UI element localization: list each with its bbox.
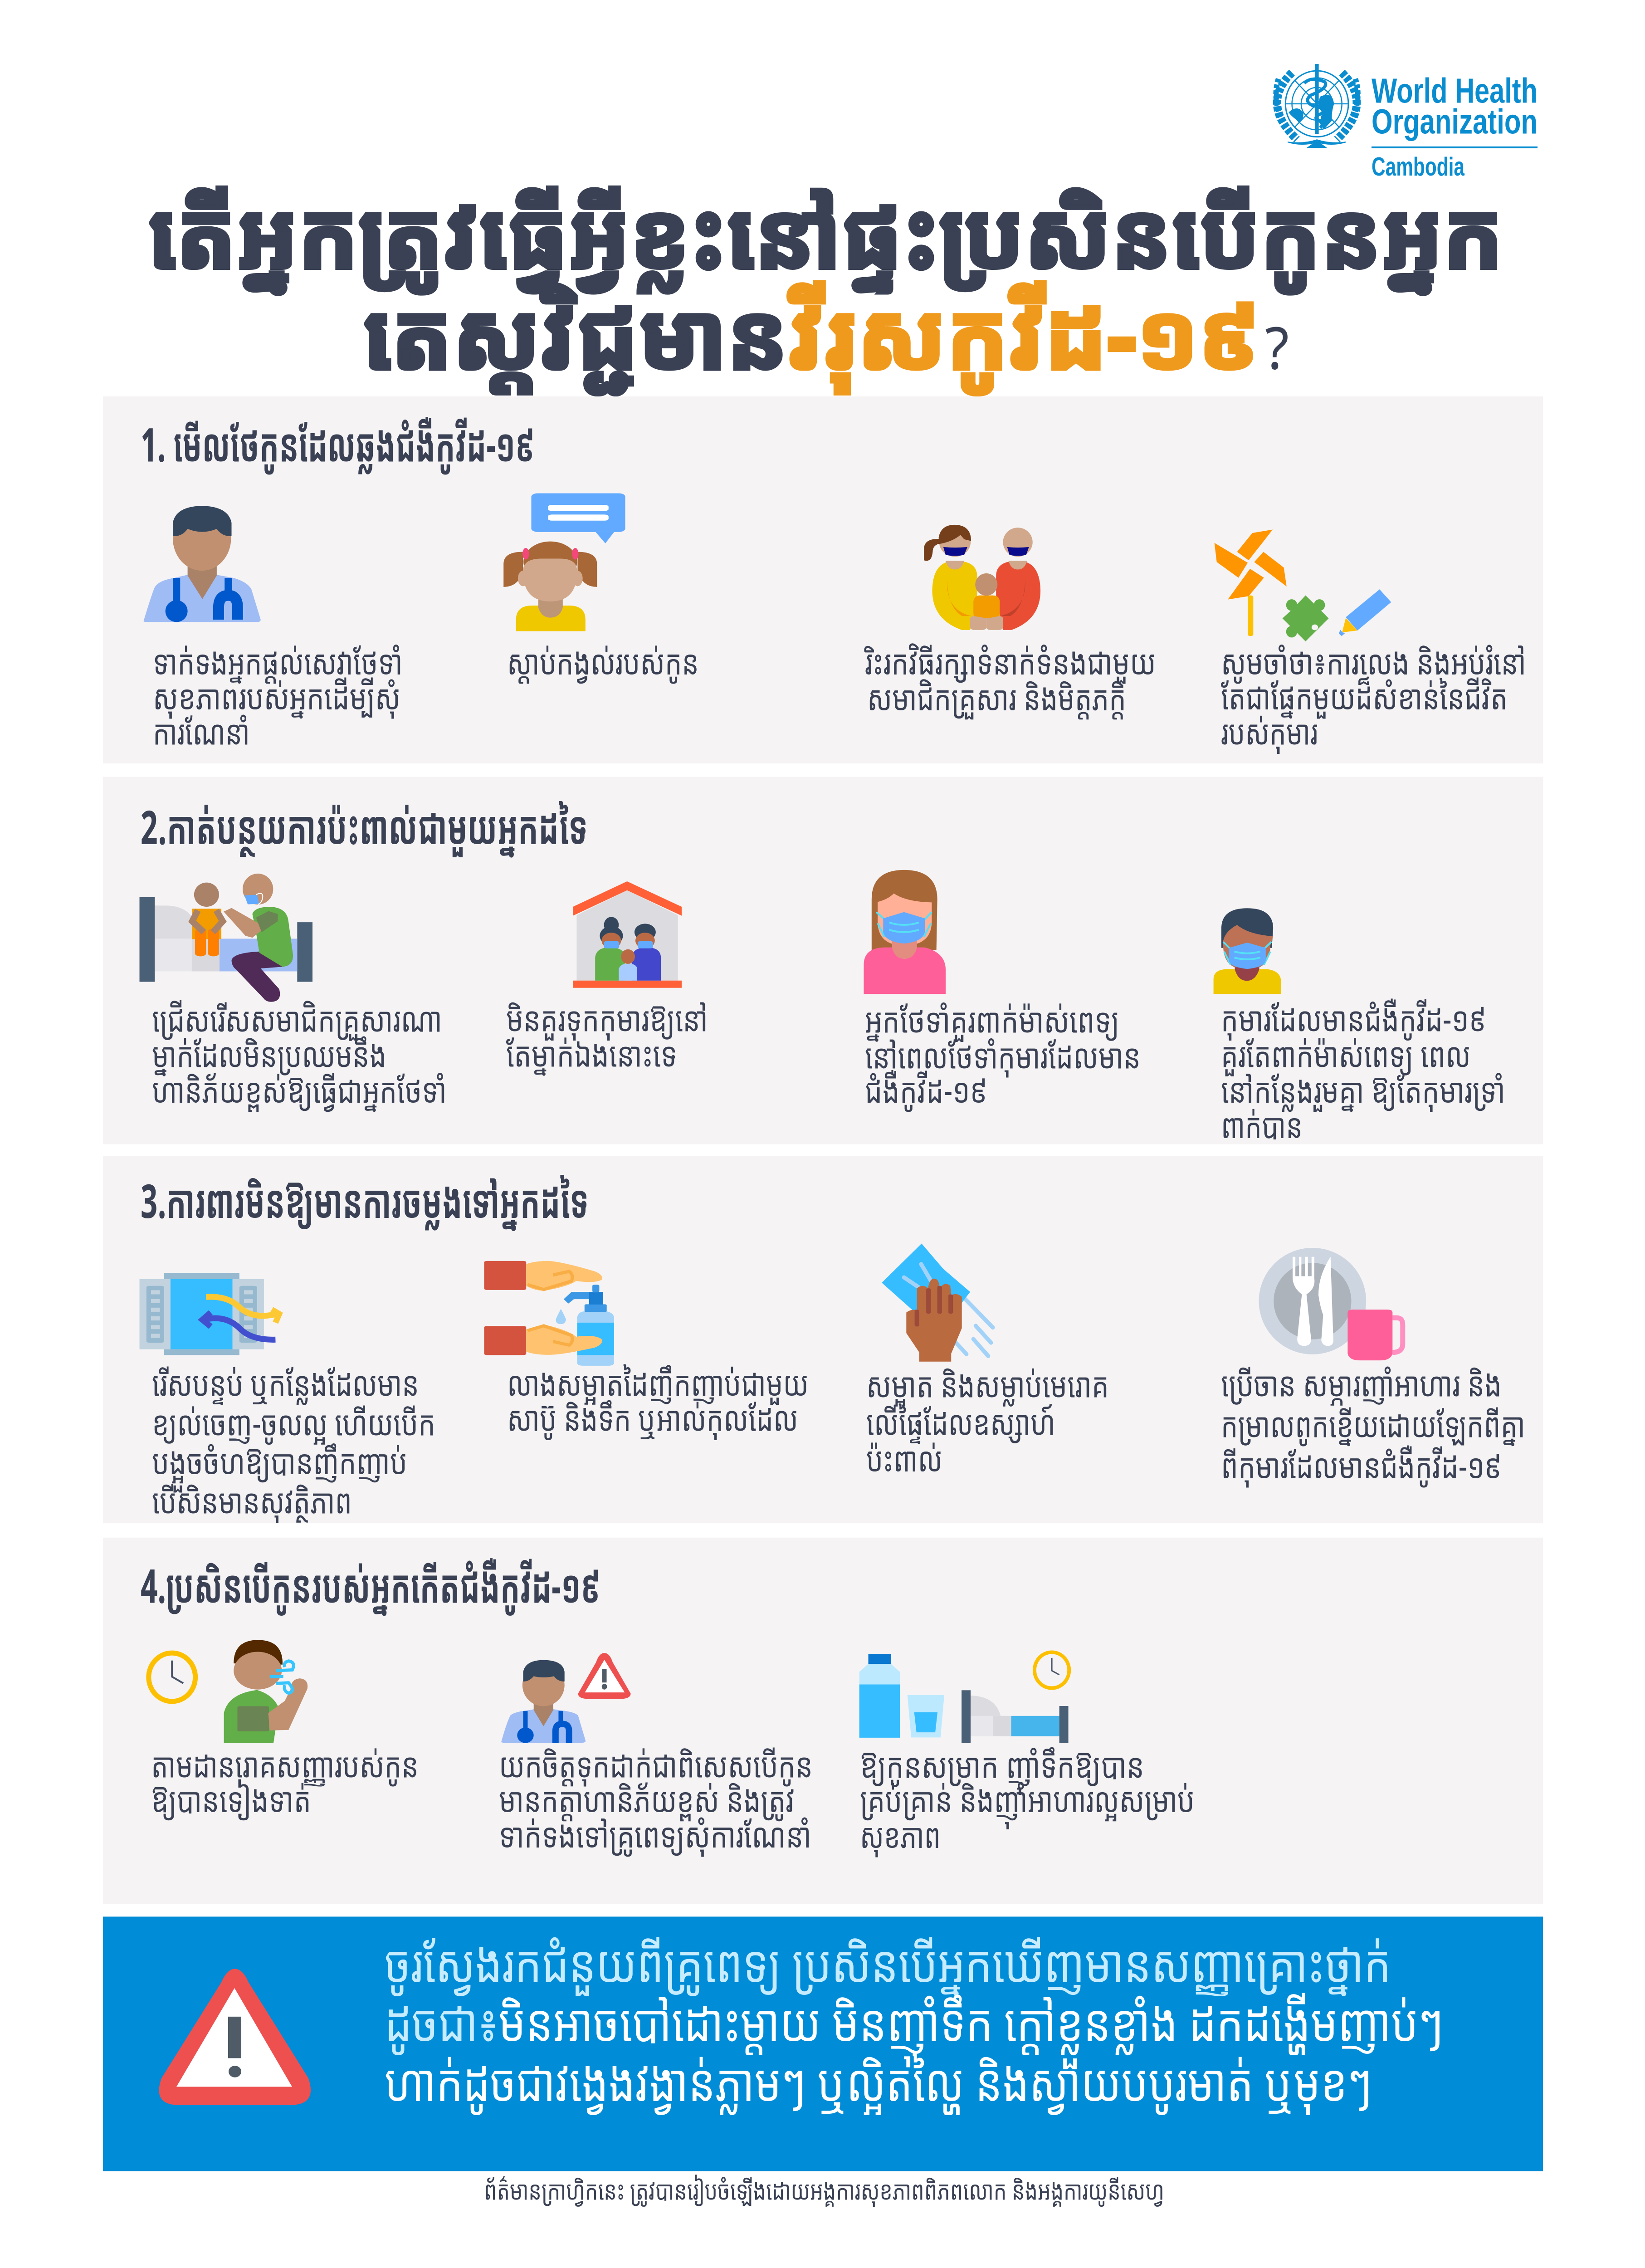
text: keep in touch: រិះរកវិធីរក្សាទំនាក់ទំនងជាមួយ: [864, 639, 1156, 685]
text: use separate dishes: [1221, 1360, 1525, 1489]
text: do not leave children alone: តែម្នាក់ឯងនោះទេ: [506, 1031, 677, 1077]
text: seek care if danger signs: ហាក់ដូចជាវង្វេងវង្វាន់ភ្លាមៗ ឬល្អិតល្ហៃ និងស្វាយបបូរមាត់ ឬមុខៗ: [385, 2046, 1372, 2116]
panel: 3 prevent transmission: [103, 1156, 1543, 1524]
text: use separate dishes: ពីកុមារដែលមានជំងឺកូវីដ-១៩: [1221, 1442, 1502, 1489]
text: play and learning: របស់កុមារ: [1221, 709, 1318, 755]
icon: coughing child and clock: [149, 1640, 308, 1743]
text: caregiver should wear a mask: ជំងឺកូវីដ-១៩: [865, 1067, 987, 1113]
text: clean and disinfect surfaces: ប៉ះពាល់: [866, 1436, 942, 1482]
text: watch for high risk factors: មានកត្តាហានិភ័យខ្ពស់ និងត្រូវ: [499, 1776, 795, 1823]
text: child should wear a mask: នៅកន្លែងរួមគ្នា ឱ្យតែកុមារទ្រាំ: [1221, 1067, 1505, 1113]
text: wash hands frequently: សាប៊ូ និងទឹក ឬអាល់កុលដែល: [507, 1395, 798, 1441]
text: seek care if danger signs: ដូចជា៖មិនអាចបៅដោះម្តាយ មិនញ៉ាំទឹក ក្តៅខ្លួនខ្លាំង ដកដង្ហើមញាប់ៗ: [385, 1986, 1444, 2069]
text: monitor symptoms: [151, 1741, 419, 1823]
footer credit: ព័ត៌មានក្រាហ្វិកនេះ ត្រូវបានរៀបចំឡើងដោយអង្គការសុខភាពពិភពលោក និងអង្គការយូនីសេហ្វ: [484, 2172, 1164, 2207]
icon: ventilated window: [140, 1273, 279, 1355]
text: caregiver should wear a mask: នៅពេលថែទាំកុមារដែលមាន: [865, 1032, 1141, 1079]
icon: water bottle, glass, bed and clock: [859, 1652, 1069, 1743]
text: choose a caregiver: ហានិភ័យខ្ពស់ឱ្យធ្វើជាអ្នកថែទាំ: [152, 1067, 447, 1113]
panel: danger signs callout: [103, 1916, 1543, 2171]
text: contact your health provider: ទាក់ទងអ្នកផ្តល់សេវាថែទាំ: [153, 639, 403, 685]
icon: doctor: [143, 506, 261, 622]
text: wash hands frequently: [507, 1359, 809, 1441]
icon: warning triangle: [159, 1969, 311, 2105]
logo: World Health Organization Cambodia: [1276, 64, 1538, 181]
title: [148, 170, 1503, 396]
text: contact your health provider: [153, 639, 403, 755]
text: contact your health provider: សុខភាពរបស់អ្នកដើម្បីសុំ: [153, 674, 400, 720]
text: play and learning: តែជាផ្នែកមួយដ៏សំខាន់នៃជីវិត: [1221, 674, 1508, 720]
text: rest, fluids and food: គ្រប់គ្រាន់ និងញ៉ាំអាហារល្អសម្រាប់: [860, 1776, 1195, 1829]
title: តើអ្នកត្រូវធ្វើអ្វីខ្លះនៅផ្ទះប្រសិនបើកូនអ្នក: [148, 170, 1503, 295]
text: choose a ventilated room: បើសិនមានសុវត្ថិភាព: [152, 1477, 352, 1524]
logo: World Health Organization Cambodia: World Health: [1372, 72, 1538, 110]
text: choose a ventilated room: រើសបន្ទប់ ឬកន្លែងដែលមាន: [152, 1360, 419, 1407]
icon: plate, cutlery and mug: [1259, 1248, 1403, 1360]
text: do not leave children alone: មិនគួរទុកកុមារឱ្យនៅ: [506, 995, 708, 1041]
icon: hand washing with soap: [484, 1261, 614, 1366]
text: choose a caregiver: ម្នាក់ដែលមិនប្រឈមនឹង: [152, 1031, 386, 1077]
icon: hand wiping surface with cloth: [882, 1243, 993, 1362]
text: contact your health provider: ការណែនាំ: [153, 709, 250, 755]
icon: family with masks: [924, 525, 1040, 630]
icon: family in house: [573, 881, 682, 988]
logo: World Health Organization Cambodia: Organization: [1372, 103, 1538, 141]
icon: woman wearing mask: [864, 870, 946, 994]
text: play and learning: [1221, 639, 1526, 755]
text: wash hands frequently: លាងសម្អាតដៃញឹកញាប់ជាមួយ: [507, 1359, 809, 1406]
text: use separate dishes: កម្រាលពូកខ្នើយដោយឡែកពីគ្នា: [1221, 1401, 1525, 1447]
panel: 4 if your child has COVID-19: [103, 1538, 1543, 1904]
text: choose a caregiver: [152, 996, 447, 1113]
icon: WHO emblem: [1276, 64, 1358, 148]
text: seek care if danger signs: [385, 1927, 1444, 2116]
text: watch for high risk factors: ទាក់ទងទៅគ្រូពេទ្យសុំការណែនាំ: [499, 1811, 811, 1858]
text: watch for high risk factors: យកចិត្តទុកដាក់ជាពិសេសបើកូន: [499, 1741, 813, 1788]
logo: World Health Organization Cambodia: Cambodia: [1372, 152, 1465, 181]
heading: section 4: 4.ប្រសិនបើកូនរបស់អ្នកកើតជំងឺកូវីដ-១៩: [141, 1554, 600, 1617]
icon: child wearing mask: [1214, 908, 1281, 994]
icon: pinwheel, puzzle piece and pencil: [1215, 529, 1391, 641]
text: clean and disinfect surfaces: សម្អាត និងសម្លាប់មេរោគ: [866, 1361, 1109, 1408]
text: listen to concerns: ស្តាប់កង្វល់របស់កូន: [507, 639, 699, 685]
heading: section 3: 3.ការពារមិនឱ្យមានការចម្លងទៅអ្នកដទៃ: [141, 1169, 589, 1232]
text: child should wear a mask: កុមារដែលមានជំងឺកូវីដ-១៩: [1221, 995, 1486, 1041]
text: monitor symptoms: តាមដានរោគសញ្ញារបស់កូន: [151, 1741, 419, 1788]
title: ?: [1265, 307, 1289, 386]
title: តេស្តវិជ្ជមាន: [363, 271, 788, 396]
panel: 2 reduce contact: [103, 777, 1543, 1149]
text: choose a ventilated room: [152, 1360, 435, 1524]
text: monitor symptoms: ឱ្យបានទៀងទាត់: [151, 1776, 311, 1823]
icon: girl with speech bubble: [503, 493, 625, 631]
text: use separate dishes: ប្រើចាន សម្ភារញាំអាហារ និង: [1221, 1360, 1502, 1407]
text: child should wear a mask: គួរតែពាក់ម៉ាស់ពេទ្យ ពេល: [1221, 1031, 1471, 1077]
text: caregiver should wear a mask: អ្នកថែទាំគួរពាក់ម៉ាស់ពេទ្យ: [865, 997, 1119, 1043]
text: watch for high risk factors: [499, 1741, 813, 1858]
icon: caregiver on bed with child: [140, 874, 312, 1002]
text: rest, fluids and food: ឱ្យកូនសម្រាក ញ៉ាំទឹកឱ្យបាន: [860, 1742, 1144, 1795]
text: rest, fluids and food: [860, 1742, 1195, 1858]
text: clean and disinfect surfaces: [866, 1361, 1109, 1482]
text: rest, fluids and food: សុខភាព: [860, 1812, 941, 1858]
heading: section 1: 1. មើលថែកូនដែលឆ្លងជំងឺកូវីដ-១៩: [141, 413, 535, 475]
text: caregiver should wear a mask: [865, 997, 1141, 1113]
text: keep in touch: សមាជិកគ្រួសារ និងមិត្តភក្តិ: [867, 675, 1126, 721]
title: វីរុសកូវីដ-១៩: [788, 271, 1260, 396]
text: choose a ventilated room: បង្អួចចំហឱ្យបានញឹកញាប់: [152, 1438, 407, 1492]
text: play and learning: សូមចាំថា៖ការលេង និងអប់រំនៅ: [1221, 639, 1526, 685]
text: do not leave children alone: [506, 995, 708, 1077]
text: seek care if danger signs: ចូរស្វែងរកជំនួយពីគ្រូពេទ្យ ប្រសិនបើអ្នកឃើញមានសញ្ញាគ្រោះថ្នាក់: [385, 1927, 1391, 1998]
text: clean and disinfect surfaces: លើផ្ទៃដែលឧស្សាហ៍: [866, 1399, 1055, 1445]
text: choose a ventilated room: ខ្យល់ចេញ-ចូលល្អ ហើយបើក: [152, 1399, 435, 1446]
text: child should wear a mask: [1221, 995, 1505, 1149]
icon: doctor and warning sign: [501, 1653, 631, 1743]
text: keep in touch: [864, 639, 1156, 721]
panel: 1 caring for the child: [103, 396, 1543, 763]
text: choose a caregiver: ជ្រើសរើសសមាជិកគ្រួសារណា: [152, 996, 442, 1042]
text: child should wear a mask: ពាក់បាន: [1221, 1102, 1303, 1149]
heading: section 2: 2.កាត់បន្ថយការប៉ះពាល់ជាមួយអ្នកដទៃ: [141, 795, 588, 858]
